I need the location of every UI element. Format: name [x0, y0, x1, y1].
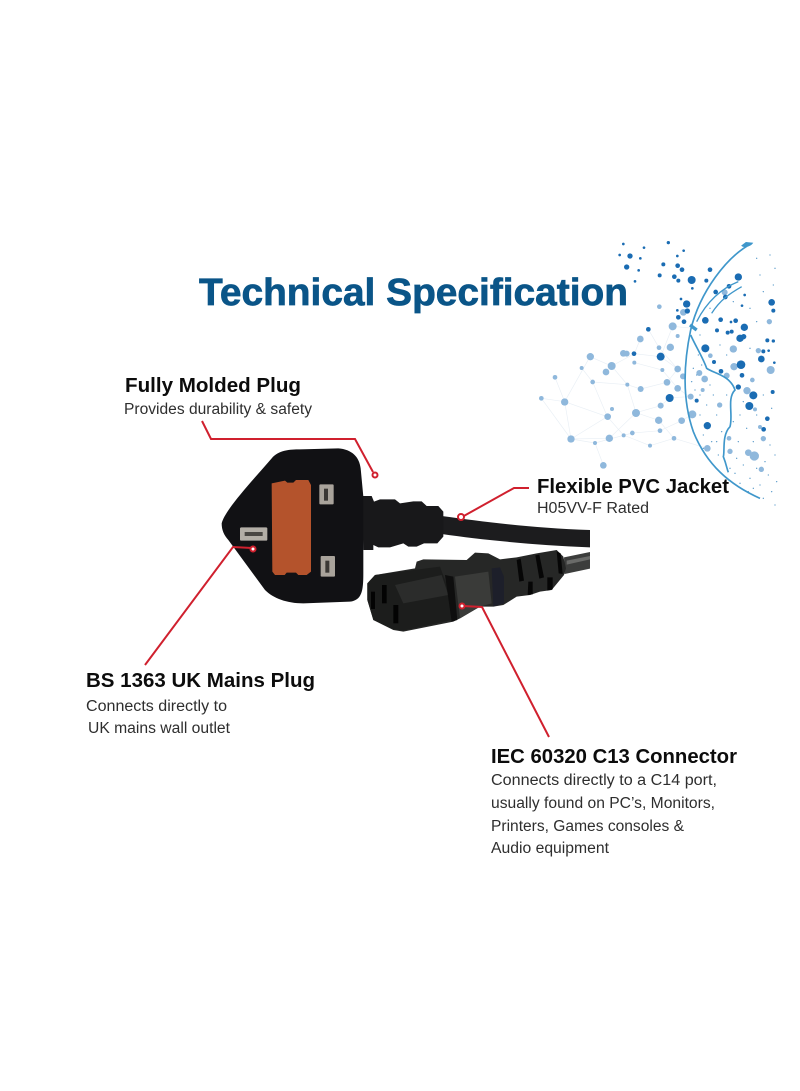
callout: flexible PVC jacket: H05VV-F Rated	[537, 500, 649, 517]
callout: fully molded plug: Provides durability & safety	[124, 401, 312, 418]
leader: UK mains plug	[145, 547, 252, 665]
callout: BS 1363 UK mains plug	[86, 670, 315, 737]
leader: PVC jacket	[462, 488, 529, 517]
leader end markers	[250, 472, 464, 608]
C13 connector	[367, 550, 590, 632]
connector mid section	[455, 572, 492, 618]
callout: IEC 60320 C13 connector: Audio equipment	[491, 840, 610, 857]
connector front face	[367, 567, 452, 631]
leader lines	[145, 421, 549, 737]
callout: IEC 60320 C13 connector: Connects directly to a C14 port,	[491, 772, 717, 789]
callout: IEC 60320 C13 connector: IEC 60320 C13 Connector	[491, 746, 737, 768]
cable to plug	[442, 516, 590, 547]
power cord photo	[222, 448, 590, 632]
earth pin	[240, 527, 267, 541]
title: Technical Specification	[199, 272, 628, 314]
neutral pin	[321, 556, 335, 577]
callout: flexible PVC jacket	[537, 476, 729, 517]
connector silhouette	[367, 550, 566, 632]
orange fuse cover	[272, 480, 311, 575]
callout: IEC 60320 C13 connector: usually found on PC’s, Monitors,	[491, 795, 715, 812]
lower cable	[564, 552, 590, 574]
callout: BS 1363 UK mains plug: UK mains wall outlet	[88, 720, 231, 737]
strain relief slots	[517, 559, 524, 582]
callout: fully molded plug: Fully Molded Plug	[125, 375, 301, 397]
socket holes	[371, 592, 375, 609]
callout: IEC 60320 C13 connector: Printers, Games consoles &	[491, 818, 685, 835]
leader: C13 connector	[463, 606, 549, 737]
UK plug body	[222, 448, 363, 603]
leader: fully molded plug	[202, 421, 373, 472]
callout: IEC 60320 C13 connector	[491, 746, 737, 857]
callout: BS 1363 UK mains plug: Connects directly to	[86, 698, 227, 715]
callout: fully molded plug	[124, 375, 312, 418]
callout: flexible PVC jacket: Flexible PVC Jacket	[537, 476, 729, 498]
callout: BS 1363 UK mains plug: BS 1363 UK Mains Plug	[86, 670, 315, 692]
strain relief: plug	[362, 496, 443, 550]
live pin	[319, 484, 334, 504]
globe network graphic	[539, 241, 777, 506]
